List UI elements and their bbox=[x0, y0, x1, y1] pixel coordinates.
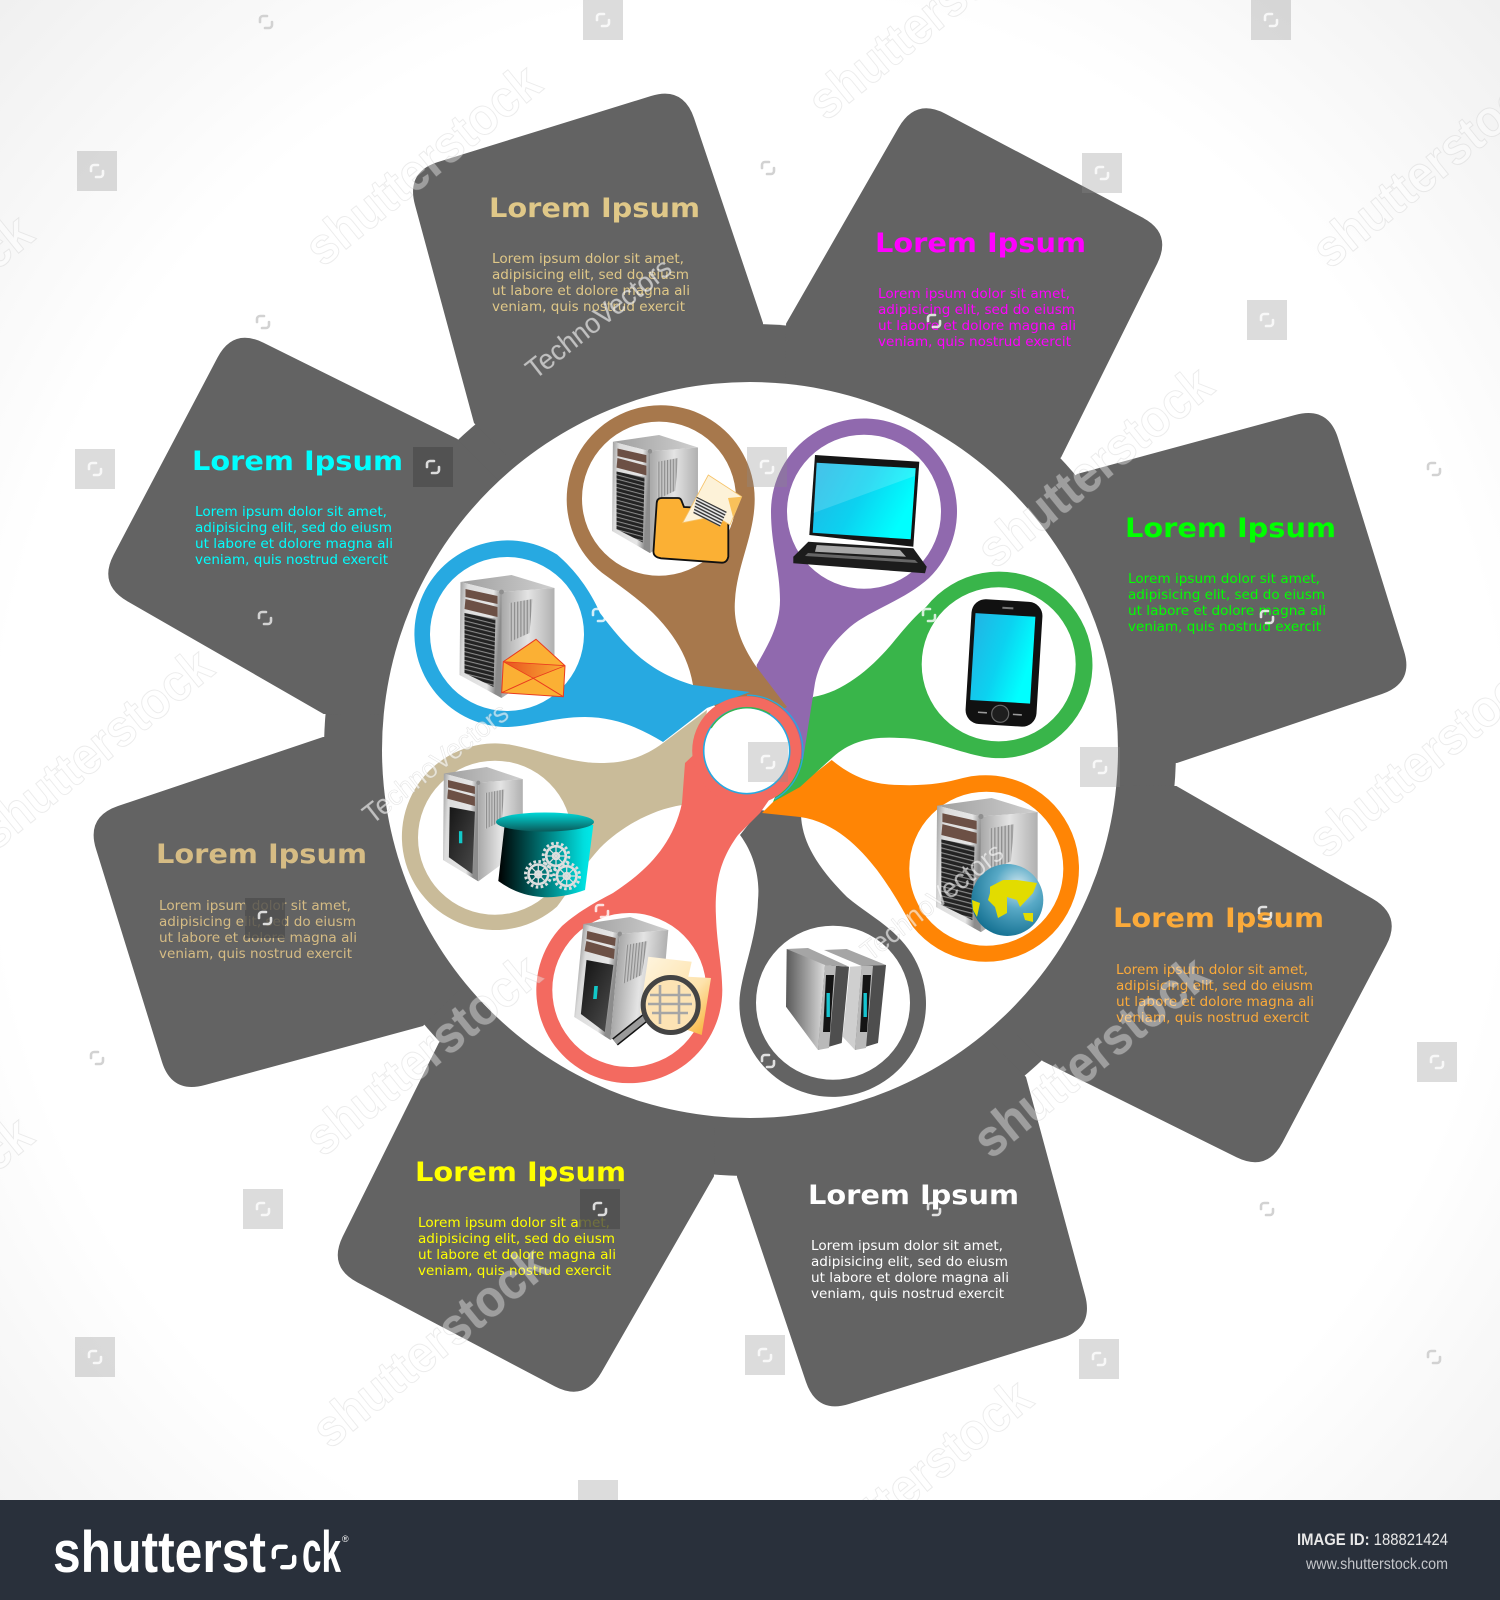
petal: green bbox=[773, 572, 1092, 802]
body text: veniam, quis nostrud exercit bbox=[159, 946, 352, 962]
watermark: shutterstock text: shutterstock bbox=[294, 53, 552, 277]
central hub bbox=[692, 695, 803, 805]
icon: twin servers bbox=[786, 948, 886, 1050]
heading: Lorem Ipsum bbox=[1113, 903, 1324, 934]
watermark: logo marks bbox=[89, 14, 1443, 1365]
body text bbox=[492, 251, 690, 315]
icon: server with database bbox=[443, 767, 594, 897]
petal: purple bbox=[757, 418, 957, 760]
body text: Lorem ipsum dolor sit amet, bbox=[159, 898, 351, 914]
body text: adipisicing elit, sed do eiusm bbox=[1128, 587, 1325, 603]
image id: IMAGE ID: 188821424 bbox=[1297, 1530, 1448, 1549]
body text: adipisicing elit, sed do eiusm bbox=[418, 1231, 615, 1247]
footer logo: shutterst bbox=[53, 1520, 266, 1585]
body text: adipisicing elit, sed do eiusm bbox=[159, 914, 356, 930]
panel: tan left bbox=[156, 839, 367, 962]
body text: adipisicing elit, sed do eiusm bbox=[878, 302, 1075, 318]
heading: Lorem Ipsum bbox=[1125, 513, 1336, 544]
body text: veniam, quis nostrud exercit bbox=[418, 1263, 611, 1279]
heading: Lorem Ipsum bbox=[808, 1180, 1019, 1211]
icon: server with globe bbox=[936, 798, 1043, 936]
body text: ut labore et dolore magna ali bbox=[878, 318, 1076, 334]
panel: yellow bbox=[415, 1157, 626, 1279]
body text: adipisicing elit, sed do eiusm bbox=[1116, 978, 1313, 994]
body text: Lorem ipsum dolor sit amet, bbox=[878, 286, 1070, 302]
watermark: shutterstock text: shutterstock bbox=[301, 1235, 559, 1459]
petal: orange bbox=[762, 760, 1079, 962]
body text bbox=[1128, 571, 1326, 635]
petal: red bbox=[536, 730, 790, 1083]
body text: veniam, quis nostrud exercit bbox=[195, 552, 388, 568]
body text: veniam, quis nostrud exercit bbox=[1128, 619, 1321, 635]
footer logo: ® bbox=[342, 1534, 349, 1544]
body text: Lorem ipsum dolor sit amet, bbox=[492, 251, 684, 267]
watermark: shutterstock text: shutterstock bbox=[294, 943, 552, 1167]
petal: blue bbox=[414, 540, 750, 742]
watermark: TechnoVectors text: TechnoVectors bbox=[520, 252, 677, 385]
body text: adipisicing elit, sed do eiusm bbox=[811, 1254, 1008, 1270]
body text: ut labore et dolore magna ali bbox=[195, 536, 393, 552]
body text bbox=[878, 286, 1076, 350]
petals bbox=[402, 405, 1092, 1097]
heading: Lorem Ipsum bbox=[415, 1157, 626, 1188]
petal: brown bbox=[567, 405, 787, 730]
body text: veniam, quis nostrud exercit bbox=[878, 334, 1071, 350]
heading: Lorem Ipsum bbox=[875, 228, 1086, 259]
body text bbox=[418, 1215, 616, 1279]
petal: gray bbox=[739, 810, 926, 1097]
panel: white bbox=[808, 1180, 1019, 1302]
body text: ut labore et dolore magna ali bbox=[492, 283, 690, 299]
body text: adipisicing elit, sed do eiusm bbox=[195, 520, 392, 536]
icon: server with magnifier bbox=[572, 917, 711, 1042]
body text: ut labore et dolore magna ali bbox=[159, 930, 357, 946]
body text: ut labore et dolore magna ali bbox=[811, 1270, 1009, 1286]
heading: Lorem Ipsum bbox=[156, 839, 367, 870]
footer logo: ck bbox=[302, 1520, 341, 1585]
heading: Lorem Ipsum bbox=[192, 446, 403, 477]
body text: Lorem ipsum dolor sit amet, bbox=[811, 1238, 1003, 1254]
watermark: TechnoVectors text: TechnoVectors bbox=[855, 836, 1009, 967]
icon: laptop bbox=[793, 455, 927, 573]
body text: veniam, quis nostrud exercit bbox=[492, 299, 685, 315]
watermark: TechnoVectors text: TechnoVectors bbox=[357, 697, 514, 830]
body text: Lorem ipsum dolor sit amet, bbox=[418, 1215, 610, 1231]
icon: server with envelope bbox=[460, 575, 565, 698]
footer bar bbox=[0, 1500, 1500, 1600]
body text: Lorem ipsum dolor sit amet, bbox=[1128, 571, 1320, 587]
body text: ut labore et dolore magna ali bbox=[1128, 603, 1326, 619]
body text: Lorem ipsum dolor sit amet, bbox=[1116, 962, 1308, 978]
panel: orange bbox=[1113, 903, 1324, 1026]
panel: green bbox=[1125, 513, 1336, 635]
panel: magenta bbox=[875, 228, 1086, 350]
petal: tan bbox=[402, 710, 707, 930]
panel: tan top bbox=[489, 193, 700, 315]
body text bbox=[159, 898, 357, 962]
body text bbox=[195, 504, 393, 568]
website: www.shutterstock.com bbox=[1305, 1556, 1448, 1573]
panel: cyan bbox=[192, 446, 403, 568]
body text: veniam, quis nostrud exercit bbox=[1116, 1010, 1309, 1026]
body text: ut labore et dolore magna ali bbox=[1116, 994, 1314, 1010]
watermark: shutterstock text: shutterstock bbox=[962, 945, 1220, 1169]
body text: Lorem ipsum dolor sit amet, bbox=[195, 504, 387, 520]
icon: server with folder bbox=[612, 435, 742, 563]
watermark: shutterstock text: shutterstock bbox=[785, 1368, 1043, 1592]
body text bbox=[1116, 962, 1314, 1026]
heading: Lorem Ipsum bbox=[489, 193, 700, 224]
icon: smartphone bbox=[965, 598, 1043, 727]
body text: ut labore et dolore magna ali bbox=[418, 1247, 616, 1263]
body text: adipisicing elit, sed do eiusm bbox=[492, 267, 689, 283]
white centre disc bbox=[382, 382, 1118, 1118]
watermark: shutterstock text: shutterstock bbox=[966, 355, 1224, 579]
body text bbox=[811, 1238, 1009, 1302]
watermark: TechnoVectors text bbox=[357, 252, 1009, 967]
body text: veniam, quis nostrud exercit bbox=[811, 1286, 1004, 1302]
